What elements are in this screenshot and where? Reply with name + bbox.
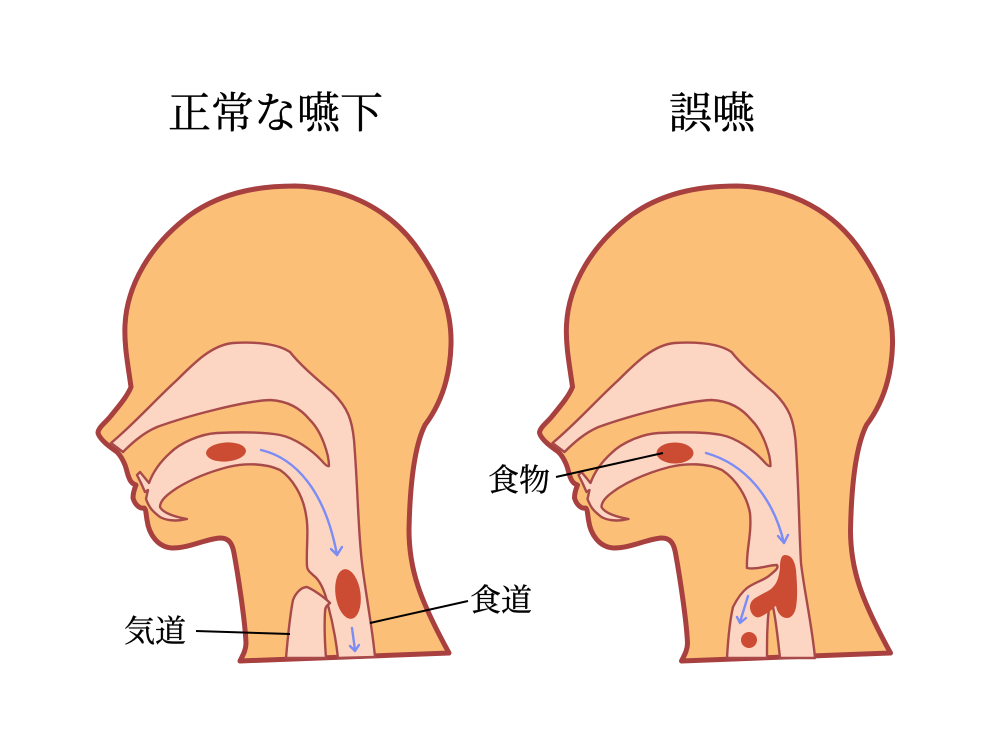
label: food: 食物 xyxy=(488,463,550,498)
food in mouth xyxy=(205,441,247,463)
food entering airway and esophagus xyxy=(750,555,797,618)
panel: normal swallowing head xyxy=(98,186,532,661)
food in mouth xyxy=(656,442,694,464)
arrow: into airway xyxy=(737,596,748,623)
panel: aspiration head xyxy=(488,186,893,661)
title: aspiration: 誤嚥 xyxy=(669,91,757,138)
airway and throat cavity xyxy=(552,343,815,658)
arrow: into esophagus xyxy=(350,628,359,651)
food particle in airway xyxy=(741,632,757,648)
arrow: food path xyxy=(261,450,342,555)
label: esophagus: 食道 xyxy=(470,583,532,618)
label line: airway xyxy=(196,631,290,634)
airway and throat cavity xyxy=(111,343,375,658)
label line: esophagus xyxy=(370,601,468,623)
head silhouette xyxy=(98,186,451,661)
food in esophagus xyxy=(332,568,364,620)
label: airway: 気道 xyxy=(124,614,186,649)
title: normal swallowing: 正常な嚥下 xyxy=(168,91,383,138)
trachea xyxy=(286,587,330,658)
head silhouette xyxy=(540,186,893,661)
arrow: food path xyxy=(706,453,788,543)
label line: food xyxy=(556,453,663,477)
